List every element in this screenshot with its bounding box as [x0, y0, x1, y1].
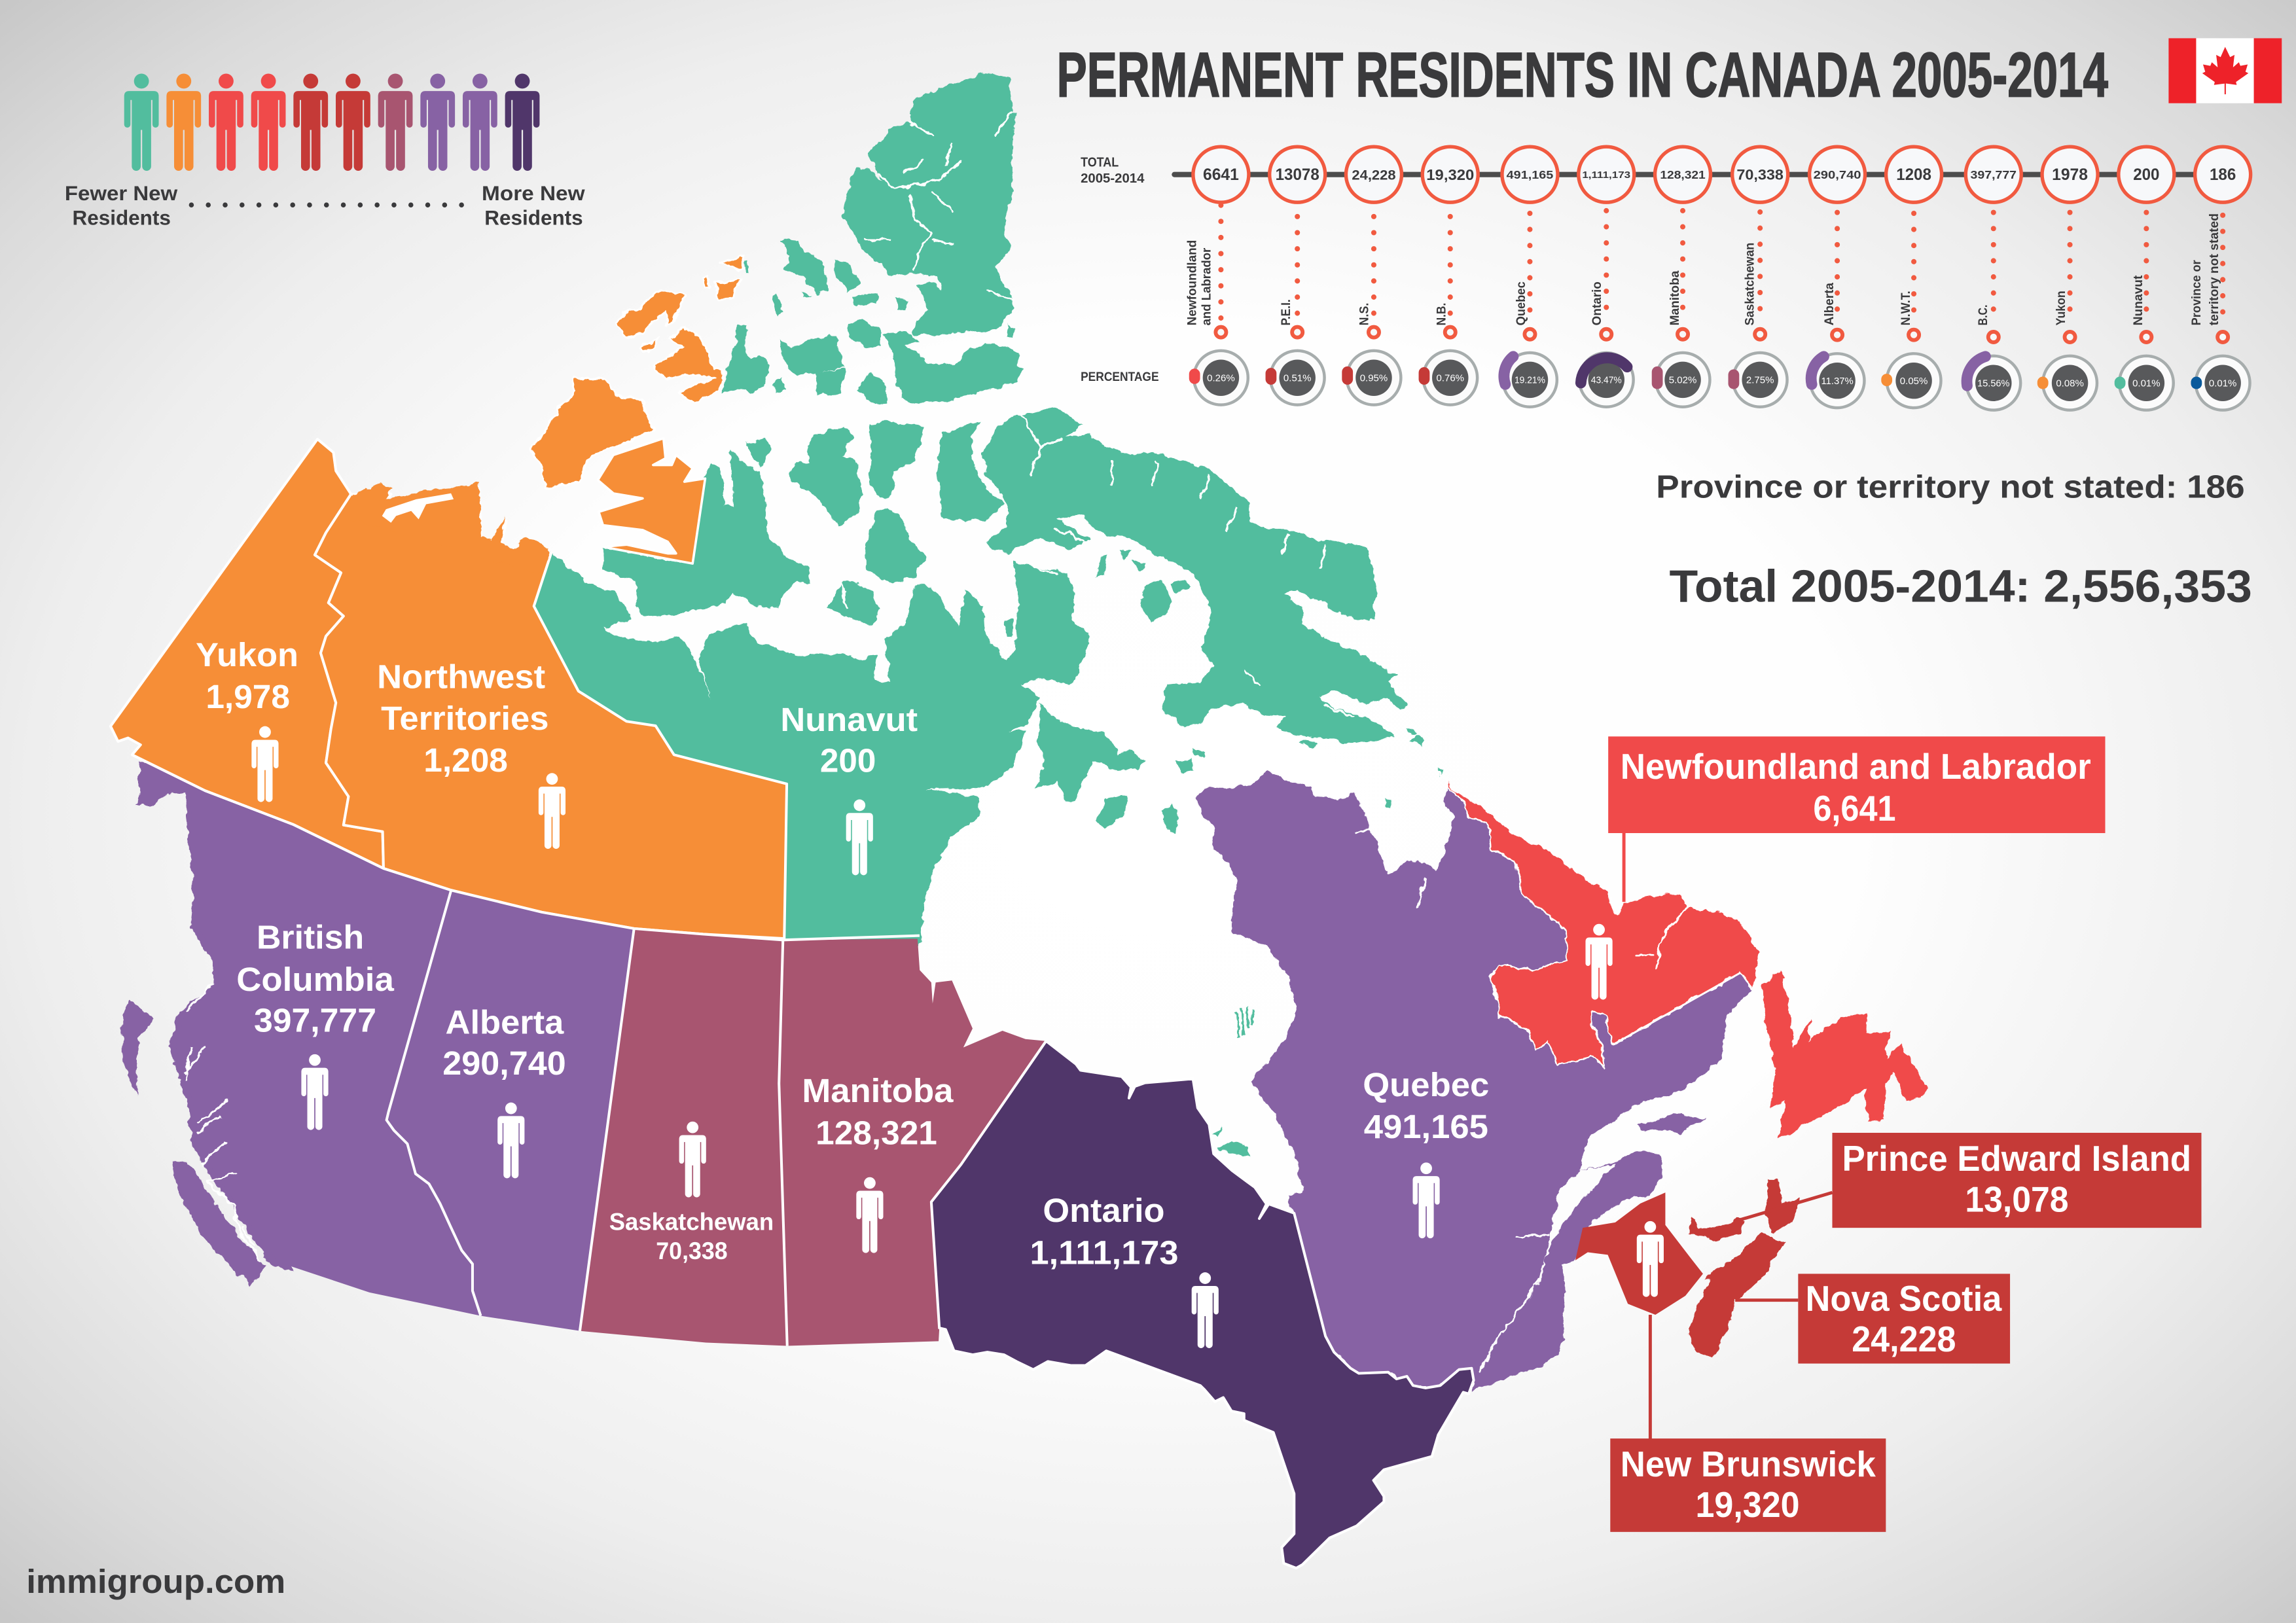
province label: Alberta: 290,740: [442, 1044, 566, 1082]
province: Newfoundland island: [1763, 970, 1928, 1138]
province label: Quebec: [1363, 1065, 1489, 1145]
callout: Newfoundland and Labrador: 6,641: [1813, 788, 1896, 829]
icon: person Ontario: [1192, 1272, 1219, 1348]
legend label: fewer new residents: Residents: [73, 206, 171, 229]
arctic islands in the Northwest Territories: [530, 257, 743, 488]
total circles with values: 491,165: [1507, 168, 1554, 181]
province label: Yukon: [196, 635, 298, 715]
source: immigroup.com: immigroup.com: [26, 1562, 285, 1600]
total circles with values: 70,338: [1736, 167, 1784, 183]
callout: Nova Scotia: Nova Scotia: [1806, 1278, 2002, 1319]
province label: Manitoba: 128,321: [816, 1114, 937, 1152]
icon: person Nunavut: [846, 800, 873, 875]
province label: Nunavut: 200: [820, 741, 876, 779]
rotated province names: [1186, 213, 2221, 325]
label: percentage: PERCENTAGE: [1081, 370, 1159, 384]
percentage values: 2.75%: [1746, 375, 1774, 385]
percentage values: 5.02%: [1669, 375, 1696, 385]
legend label: fewer new residents: Fewer New: [65, 182, 178, 205]
rotated province names: Alberta: [1823, 283, 1837, 325]
province label: Northwest Territories: Northwest: [377, 658, 545, 696]
rotated province names: and Labrador: [1200, 247, 1214, 325]
province: Saskatchewan: [580, 929, 787, 1346]
percentage values: [1207, 373, 2236, 389]
dotted connector lines: [1221, 205, 2223, 325]
province label: Alberta: Alberta: [446, 1003, 564, 1041]
icon: person New Brunswick: [1637, 1221, 1664, 1297]
callout: New Brunswick: 19,320: [1696, 1484, 1800, 1525]
rotated province names: Province or: [2190, 260, 2204, 325]
callout: Nova Scotia: [1735, 1274, 2010, 1364]
total circles with values: 1208: [1896, 166, 1931, 184]
province: Cape Breton: [1766, 1179, 1801, 1233]
province label: Nunavut: Nunavut: [780, 700, 918, 738]
legend label: more new residents: [482, 182, 585, 229]
province: Labrador: [1440, 772, 1761, 1067]
icon: person Newfoundland and Labrador: [1585, 924, 1613, 999]
percentage values: 0.95%: [1360, 373, 1388, 383]
St Lawrence river: [1530, 1164, 1615, 1300]
callout: Prince Edward Island: Prince Edward Island: [1842, 1138, 2191, 1179]
total circles with values: 200: [2133, 166, 2159, 184]
province label: Manitoba: [802, 1071, 954, 1152]
province label: Ontario: [1030, 1191, 1179, 1271]
province: Yukon: [111, 439, 384, 868]
rotated province names: N.S.: [1357, 303, 1371, 325]
province label: Yukon: Yukon: [196, 635, 298, 673]
callout: Prince Edward Island: 13,078: [1965, 1179, 2069, 1219]
icon: person Quebec: [1412, 1162, 1440, 1238]
province: British Columbia: [161, 761, 480, 1316]
icon: person British Columbia: [301, 1054, 329, 1130]
percentage values: 43.47%: [1591, 375, 1622, 385]
total circles with values: 24,228: [1352, 167, 1396, 183]
percentage values: 0.01%: [2132, 378, 2161, 389]
total circles with values: [1193, 147, 2251, 202]
province label: Quebec: 491,165: [1364, 1107, 1488, 1145]
legend label: more new residents: Residents: [484, 206, 583, 229]
percentage rings: [1194, 351, 2250, 410]
icon: person Yukon: [251, 726, 279, 802]
province label: Saskatchewan: Saskatchewan: [609, 1208, 774, 1235]
total circles with values: 19,320: [1426, 166, 1474, 183]
icon: person Manitoba: [856, 1177, 884, 1253]
provinces: Prince Edward Island and Nova Scotia: [1688, 1179, 1801, 1358]
province: Manitoba: [779, 939, 1046, 1346]
great bear inlet sliver: [382, 493, 454, 523]
rotated province names: Quebec: [1515, 281, 1528, 325]
province label: Saskatchewan: 70,338: [656, 1238, 728, 1264]
total 2005-2014: Total 2005-2014: 2,556,353: [1669, 561, 2252, 612]
percentage values: 0.08%: [2056, 378, 2084, 389]
callout: New Brunswick: New Brunswick: [1621, 1444, 1876, 1484]
callout: Prince Edward Island: [1740, 1133, 2201, 1228]
legend label: more new residents: More New: [482, 182, 585, 205]
province: Ontario: [931, 1041, 1474, 1568]
rotated province names: Manitoba: [1668, 270, 1682, 325]
British Columbia islands and inlets: [122, 984, 266, 1286]
icon: Canadian flag: [2168, 38, 2282, 103]
rotated province names: N.B.: [1435, 303, 1449, 325]
province label: Alberta: [442, 1003, 566, 1082]
total circles with values: 13078: [1276, 166, 1319, 184]
province label: Northwest Territories: [377, 658, 549, 779]
label: total 2005-2014: 2005-2014: [1081, 171, 1145, 186]
Quebec Labrador straight border: [1613, 972, 1740, 1045]
percentage values: 0.01%: [2209, 378, 2236, 389]
Labrador lakes: [1636, 908, 1688, 967]
percentage values: 15.56%: [1977, 378, 2009, 389]
icon: row of ten people coloured by scale: [124, 74, 539, 171]
icon: person Saskatchewan: [679, 1122, 706, 1198]
rotated province names: Nunavut: [2132, 275, 2145, 325]
percentage arcs: [1194, 357, 2197, 385]
icon: person Northwest Territories: [539, 773, 565, 849]
boundaries between western provinces: [132, 755, 920, 1346]
province label: British Columbia: British: [257, 918, 364, 956]
rotated province names: Yukon: [2054, 291, 2068, 325]
province label: British Columbia: [236, 918, 394, 1039]
callout: Nova Scotia: 24,228: [1852, 1319, 1956, 1359]
timeline bar: [1174, 173, 2218, 175]
rotated province names: Ontario: [1590, 281, 1604, 325]
province label: Nunavut: [780, 700, 918, 779]
callout: New Brunswick: [1610, 1315, 1886, 1532]
small connector rings: [1215, 327, 2228, 342]
province: Quebec: [1195, 770, 1753, 1391]
province: Alberta: [387, 890, 634, 1331]
total circles with values: 290,740: [1814, 168, 1861, 181]
province label: Northwest Territories: Territories: [381, 699, 549, 737]
total circles with values: 1,111,173: [1582, 169, 1630, 181]
percentage values: 19.21%: [1515, 375, 1545, 385]
callout: Newfoundland and Labrador: Newfoundland and Labrador: [1621, 746, 2091, 787]
province label: British Columbia: Columbia: [236, 960, 394, 998]
province: Northwest Territories: [315, 488, 787, 938]
legend: fewer to more new residents: [65, 74, 585, 229]
province label: Ontario: Ontario: [1043, 1191, 1165, 1229]
total circles with values: 6641: [1203, 166, 1239, 184]
callout: Newfoundland and Labrador: [1608, 736, 2105, 902]
total circles with values: 397,777: [1971, 168, 2017, 181]
province label: Yukon: 1,978: [206, 677, 290, 715]
total circles with values: 128,321: [1660, 168, 1706, 181]
rotated province names: Newfoundland: [1186, 240, 1200, 325]
arctic islands and mainland of Nunavut: [527, 73, 1444, 1156]
Quebec rivers: [1354, 825, 1549, 1371]
Anticosti island: [1636, 1114, 1706, 1133]
province: New Brunswick: [1575, 1192, 1703, 1315]
note: province or territory not stated: Province or territory not stated: 186: [1656, 469, 2245, 505]
provinces: Quebec and Labrador: [1195, 770, 1928, 1391]
Northwest Territories coastal strip: [351, 482, 550, 574]
total circles with values: 1978: [2052, 166, 2088, 184]
province: British Columbia coastal strip: [135, 761, 293, 1271]
percentage values: 0.05%: [1900, 376, 1928, 387]
rotated province names: P.E.I.: [1280, 299, 1293, 325]
percentage values: 11.37%: [1821, 376, 1854, 387]
legend dotted scale line: [191, 204, 463, 206]
rotated province names: territory not stated: [2208, 213, 2221, 325]
timeline: totals by province: [1081, 147, 2251, 342]
label: total 2005-2014: TOTAL: [1081, 155, 1119, 169]
province label: Manitoba: Manitoba: [802, 1071, 954, 1109]
canada map: [111, 73, 1928, 1568]
province label: Saskatchewan: [609, 1208, 774, 1264]
percentage values: 0.26%: [1207, 373, 1235, 383]
percentage values: 0.76%: [1437, 373, 1464, 383]
rotated province names: B.C.: [1977, 305, 1990, 325]
label: total 2005-2014: [1081, 155, 1145, 186]
province: Prince Edward Island: [1691, 1217, 1744, 1241]
province label: Ontario: 1,111,173: [1030, 1233, 1179, 1271]
rotated province names: N.W.T.: [1899, 291, 1913, 325]
legend label: fewer new residents: [65, 182, 178, 229]
Victoria Island western part: [598, 438, 705, 563]
province label: Northwest Territories: 1,208: [423, 741, 508, 779]
icon: person Alberta: [497, 1103, 524, 1178]
rotated province names: Saskatchewan: [1743, 243, 1757, 325]
province: Nova Scotia mainland: [1688, 1233, 1785, 1358]
province label: Quebec: Quebec: [1363, 1065, 1489, 1103]
percentage row: [1081, 351, 2250, 410]
total circles with values: 186: [2210, 166, 2236, 184]
percentage values: 0.51%: [1283, 373, 1311, 383]
province label: British Columbia: 397,777: [254, 1001, 376, 1039]
